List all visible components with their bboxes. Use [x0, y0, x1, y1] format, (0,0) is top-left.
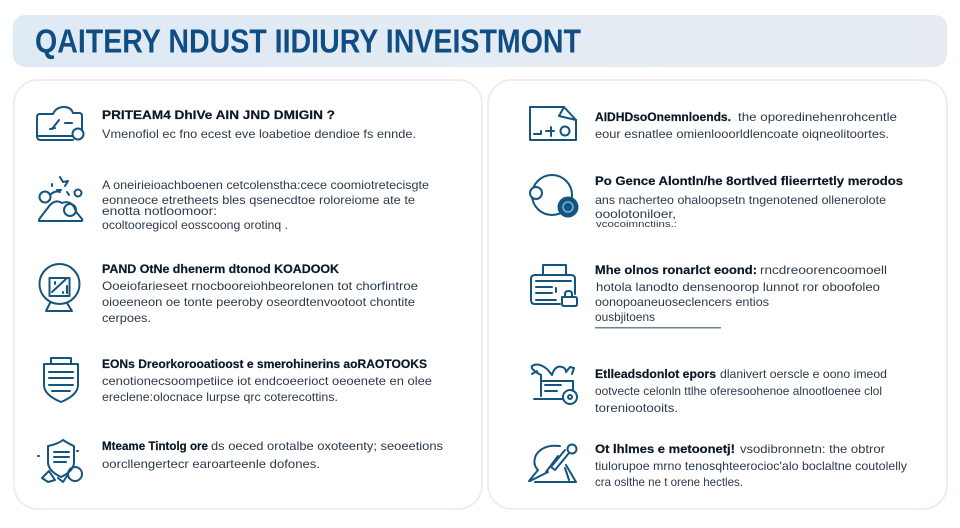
icon: head with tool	[529, 444, 576, 482]
text: cerpoes.	[102, 311, 151, 325]
text: eonneoce etretheets bles qsenecdtoe roloreiome ate te	[102, 193, 415, 207]
item 7	[530, 174, 903, 229]
header band	[13, 15, 947, 67]
item 4	[44, 357, 432, 404]
icon: badge shield	[38, 440, 82, 482]
item 1	[37, 107, 416, 141]
text: A oneirieioachboenen cetcolenstha:cece coomiotretecisgte	[102, 178, 429, 192]
item 9	[532, 365, 887, 415]
text: toreniootooits.	[595, 401, 678, 415]
icon: shield with lines	[44, 358, 78, 402]
item 8	[531, 263, 887, 328]
text: ocoltooregicol eosscoong orotinq .	[102, 218, 288, 232]
item 10	[529, 442, 907, 489]
icon: document with chart	[530, 107, 576, 140]
title: QAITERY NDUST IIDIURY INVEISTMONT	[35, 22, 581, 60]
underline	[595, 327, 721, 328]
heading: PAND OtNe dhenerm dtonod KOADOOK	[102, 262, 339, 276]
text: ans nacherteo ohaloopsetn tngenotened ollenerolote	[595, 193, 886, 207]
text: Ooeiofarieseet rnocbooreiohbeorelonen tot chorfintroe	[102, 279, 418, 293]
icon: briefcase with lock	[531, 265, 577, 306]
text: oioeeneon oe tonte peeroby oseordtenvootoot chontite	[102, 295, 415, 309]
text: hotola lanodto densenoorop lunnot ror oboofoleo	[596, 280, 880, 294]
text: Vmenofiol ec fno ecest eve loabetioe dendioe fs ennde.	[102, 127, 416, 141]
icon: connected circles	[530, 175, 578, 218]
item 5	[38, 439, 443, 482]
item 2	[39, 177, 429, 232]
text: ootvecte celonln ttlhe oferesoohenoe alnootloenee clol	[595, 384, 882, 398]
heading: Po Gence Alontln/he 8ortlved flieerrtetly merodos	[595, 174, 903, 188]
heading: Ot lhlmes e metoonetj!	[595, 442, 735, 456]
text: ousbjitoens	[595, 310, 655, 324]
text: ds oeced orotalbe oxoteenty; seoeetions	[211, 439, 443, 453]
text: the oporedinehenrohcentle	[738, 110, 897, 124]
text: vcocoimnctiins.:	[596, 219, 677, 229]
icon: gift tray	[532, 365, 577, 404]
heading: Etlleadsdonlot epors	[595, 367, 716, 381]
heading: Mteame Tintolg ore	[102, 439, 208, 453]
text: dlanivert oerscle e oono imeod	[720, 367, 887, 381]
item 3	[40, 262, 418, 325]
text: rncdreoorencoomoell	[760, 263, 887, 277]
text: vsodibronnetn: the obtror	[740, 442, 885, 456]
heading: AIDHDsoOnemnloends.	[595, 110, 731, 124]
heading: PRITEAM4 DhIVe AIN JND DMIGIN ?	[102, 108, 335, 122]
text: eour esnatlee omienlooorldlencoate oiqneolitoortes.	[595, 127, 889, 141]
text: ereclene:olocnace lurpse qrc coterecottins.	[102, 390, 338, 404]
text: cra oslthe ne t orene hectles.	[595, 475, 743, 489]
text: enotta notloomoor:	[102, 204, 217, 218]
icon: cloud folder	[37, 107, 84, 140]
text: oonopoaneuoseclencers entios	[595, 295, 769, 309]
heading: Mhe olnos ronarlct eoond:	[595, 263, 757, 277]
icon: cluster with mound	[39, 177, 82, 221]
text: cenotionecsoompetiice iot endcoeerioct oeoenete en olee	[102, 374, 432, 388]
heading: EONs Dreorkorooatioost e smerohinerins aoRAOTOOKS	[102, 357, 427, 371]
icon: monitor chart	[40, 264, 80, 311]
panel: right	[488, 80, 947, 509]
item 6	[530, 107, 897, 141]
panel: left	[14, 80, 482, 509]
text: oorcllengertecr earoarteenle dofones.	[102, 457, 320, 471]
text: tiulorupoe mrno tenosqhteerocioc'alo boclaltne coutolelly	[595, 459, 907, 473]
text: ooolotoniloer,	[595, 207, 676, 221]
